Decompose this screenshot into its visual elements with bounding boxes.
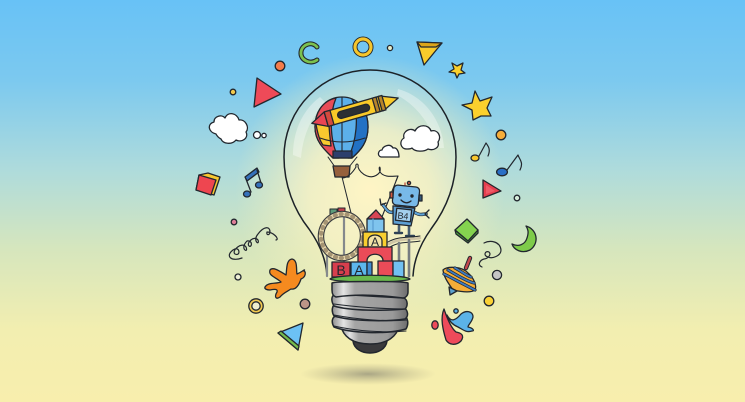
glass highlights <box>293 89 444 158</box>
icon: blue music note left <box>244 168 262 197</box>
icon: spinning top <box>443 258 476 295</box>
icon: green C ring <box>301 44 317 62</box>
icon: dark red triangle <box>483 180 501 198</box>
icon: small teal dot <box>514 195 520 201</box>
flag pole tip <box>396 176 398 181</box>
icon: big star <box>462 91 492 120</box>
icon: green crescent moon <box>512 226 536 252</box>
robot: B4 <box>397 210 409 222</box>
crayon <box>310 91 400 131</box>
icon: white cloud left <box>209 114 247 143</box>
icon: yellow dot right <box>484 296 494 306</box>
roller coaster track <box>388 236 420 276</box>
icon: brown dot <box>300 299 310 309</box>
icon: squiggle left <box>229 228 277 259</box>
cloud: big inside bulb <box>401 126 440 151</box>
hot air balloon <box>315 97 368 217</box>
icon: spiral right <box>479 241 501 267</box>
ferris wheel <box>317 208 367 276</box>
icon: green cube <box>455 219 478 243</box>
icon: pink dot <box>231 219 237 225</box>
icon: blue and green triangle <box>278 323 303 350</box>
bulb screw base <box>332 282 408 353</box>
icon: orange dot right <box>496 130 506 140</box>
icon: yellow dot <box>230 89 236 95</box>
robot <box>380 181 429 236</box>
icon: orange dot <box>275 61 285 71</box>
icon: red cube <box>196 173 220 195</box>
toy block castle: B <box>336 262 346 278</box>
icon: blue music note right <box>497 155 522 176</box>
icon: thought bubbles <box>254 132 266 138</box>
icon: small green dot top <box>387 45 393 51</box>
dark tip <box>353 341 387 353</box>
icon: gray dot <box>492 270 502 280</box>
icon: orange splat <box>265 259 305 298</box>
icon: yellow ring <box>249 299 263 313</box>
icon: gold ring top <box>355 39 371 55</box>
toy block castle: A <box>371 235 379 249</box>
icon: yellow triangle <box>417 42 442 65</box>
icon: red and blue paint splash <box>432 309 473 344</box>
bulb glass <box>284 70 456 276</box>
green ground <box>330 275 410 282</box>
toy block castle: A <box>354 262 364 278</box>
toy block castle <box>332 210 404 278</box>
icon: red triangle <box>254 78 281 107</box>
ground shadow <box>300 363 436 385</box>
icon: small star <box>449 63 465 78</box>
garland string <box>343 164 398 222</box>
glow behind bulb <box>235 55 505 325</box>
icon: yellow music note <box>471 143 489 161</box>
icon: small ring left <box>235 274 241 280</box>
cloud: small inside bulb <box>378 145 399 157</box>
